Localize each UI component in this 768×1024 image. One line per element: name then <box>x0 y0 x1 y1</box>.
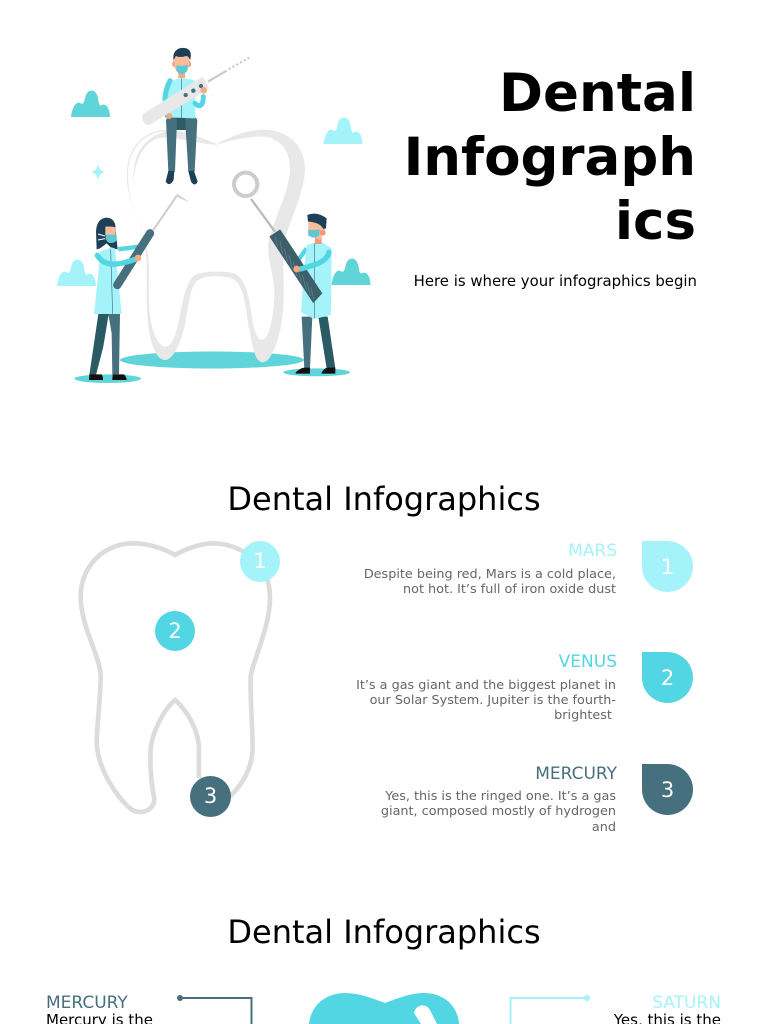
dentist: top, with syringe <box>142 48 249 184</box>
title: Infograph <box>404 127 696 188</box>
drop badge 3 <box>642 764 693 815</box>
cloud: mid right <box>332 258 370 285</box>
marker 1: 1 <box>253 549 267 573</box>
diagram tooth outline <box>81 543 270 812</box>
marker 3 <box>190 776 231 817</box>
marker 3: 3 <box>204 784 217 808</box>
big tooth <box>127 130 305 362</box>
title: ics <box>615 191 696 252</box>
cloud: top right <box>324 118 362 144</box>
label: Mercury lower: MERCURY <box>46 993 128 1013</box>
label: Venus: VENUS <box>559 652 617 672</box>
title <box>404 63 696 252</box>
label: Saturn: SATURN <box>652 993 721 1013</box>
dentist: left, with probe <box>74 194 190 383</box>
title: Dental <box>499 63 696 124</box>
text: Mars: Despite being red, Mars is a cold place, <box>364 566 616 582</box>
drop badge 2: 2 <box>661 666 674 690</box>
cloud: top left <box>71 90 110 117</box>
label: Mars: MARS <box>568 541 617 561</box>
text: Mercury <box>381 789 616 835</box>
subtitle: Here is where your infographics begin <box>414 272 697 290</box>
drop badge 1: 1 <box>661 555 674 579</box>
dentist: right, with mirror <box>234 173 350 376</box>
cloud: mid left <box>57 260 96 286</box>
drop badge 3: 3 <box>661 778 674 802</box>
text: Mercury: giant, composed mostly of hydrogen <box>381 804 616 819</box>
ground shadow <box>120 352 304 368</box>
marker 2: 2 <box>168 619 182 643</box>
connector lines: right <box>510 995 590 1024</box>
text: Venus: brightest <box>554 708 612 723</box>
connector lines: left <box>177 995 252 1024</box>
label: Mercury: MERCURY <box>535 764 617 784</box>
section heading 3: Dental Infographics <box>227 913 541 951</box>
section heading 2: Dental Infographics <box>227 480 541 518</box>
text: Mercury: Yes, this is the ringed one. It’s a gas <box>385 789 616 804</box>
text: Venus: It’s a gas giant and the biggest planet in <box>356 678 616 692</box>
sparkle <box>91 164 105 180</box>
text: Mars <box>364 566 616 597</box>
text: Venus <box>356 678 616 723</box>
drop badge 2 <box>642 652 693 703</box>
text: Mars: not hot. It’s full of iron oxide dust <box>403 582 616 597</box>
marker 2 <box>155 611 195 651</box>
text: Mercury: and <box>592 820 616 835</box>
cyan tooth <box>309 993 459 1024</box>
drop badge 1 <box>642 541 693 592</box>
text: Venus: our Solar System. Jupiter is the fourth- <box>370 693 616 708</box>
marker 1 <box>240 541 280 582</box>
